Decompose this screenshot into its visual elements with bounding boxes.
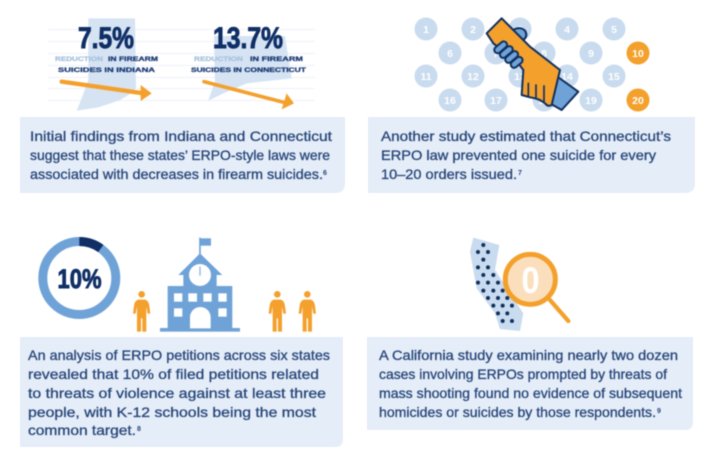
icon grid: numbered circles: 7	[493, 48, 499, 60]
icon: school building	[160, 238, 240, 332]
panel: analysis of ERPO petitions	[20, 238, 343, 447]
text box: Connecticut study: ERPO law prevented one suicide for every	[381, 147, 656, 163]
label: Indiana reduction: SUICIDES IN INDIANA	[58, 67, 155, 74]
chart: 10% donut: 10%	[58, 264, 102, 294]
text box: initial findings: associated with decreases in firearm suicides.	[30, 166, 323, 182]
icon grid: numbered circles: 1	[423, 24, 429, 36]
icon grid: numbered circles: 13	[514, 71, 526, 83]
text box: California findings	[367, 337, 693, 430]
icon grid: numbered circles: 8	[541, 48, 547, 60]
icon grid: numbered circles: 20	[632, 95, 644, 107]
icon grid: numbered circles: 15	[608, 71, 620, 83]
text box: California findings: homicides or suicides by those respondents.	[379, 404, 656, 420]
text box: petitions analysis: people, with K-12 schools being the most	[28, 404, 316, 420]
label: Connecticut reduction: REDUCTION	[194, 56, 243, 63]
text box: petitions analysis: 8	[137, 426, 141, 433]
panel: California study	[367, 238, 693, 430]
text box: petitions analysis: revealed that 10% of filed petitions related	[28, 366, 319, 382]
text box: California findings: A California study examining nearly two dozen	[379, 347, 678, 363]
icon grid: numbered circles: 12	[467, 71, 479, 83]
panel: Indiana and Connecticut reductions	[20, 18, 345, 193]
text box: petitions analysis: to threats of violence against at least three	[28, 385, 326, 401]
stat: 13.7%: 13.7%	[213, 22, 283, 55]
icon grid: numbered circles: 6	[447, 48, 453, 60]
icon grid: numbered circles: 9	[588, 48, 594, 60]
panel: suicides prevented per orders	[368, 18, 695, 193]
text box: initial findings: suggest that these states’ ERPO-style laws were	[30, 147, 330, 163]
text box: Connecticut study: Another study estimated that Connecticut’s	[381, 128, 671, 144]
label: Connecticut reduction: IN FIREARM	[250, 56, 303, 63]
label: Connecticut reduction	[191, 56, 306, 74]
map: California with dots	[470, 238, 523, 331]
text box: petitions analysis: common target.	[28, 422, 136, 438]
icon grid: numbered circles: 2	[470, 24, 476, 36]
text box: initial findings: Initial findings from Indiana and Connecticut	[30, 128, 332, 144]
text box: initial findings: 6	[323, 170, 327, 177]
icon grid: numbered circles: 4	[564, 24, 570, 36]
map: Connecticut outline	[208, 36, 292, 101]
text box: California findings: 9	[657, 408, 661, 415]
text box: initial findings	[20, 117, 345, 193]
icon grid: numbered circles: 3	[517, 24, 523, 36]
icon grid: numbered circles: 10	[632, 48, 644, 60]
icon grid: numbered circles: 14	[561, 71, 573, 83]
icon grid: numbered circles: 17	[490, 95, 502, 107]
icon: magnifying glass with zero	[505, 254, 568, 321]
text box: Connecticut study: 7	[518, 170, 522, 177]
map: Indiana outline	[77, 18, 136, 111]
icon: hand gripping firearm	[487, 18, 578, 110]
text box: Connecticut study: 10–20 orders issued.	[381, 166, 517, 182]
text box: California findings: mass shooting found no evidence of subsequent	[379, 385, 682, 401]
icon: three people	[133, 291, 316, 332]
text box: petitions analysis: An analysis of ERPO petitions across six states	[28, 347, 330, 363]
text box: Connecticut study	[368, 117, 695, 193]
label: Indiana reduction	[55, 56, 158, 74]
icon grid: numbered circles: 16	[444, 95, 456, 107]
chart: firearm suicide reductions	[48, 18, 315, 111]
icon grid: numbered circles: 11	[420, 71, 432, 83]
chart: 10% donut	[43, 242, 116, 314]
arrow: Indiana decrease	[62, 82, 152, 101]
text box: California findings: cases involving ERPOs prompted by threats of	[379, 366, 667, 382]
label: Indiana reduction: REDUCTION	[55, 56, 103, 63]
label: Connecticut reduction: SUICIDES IN CONNECTICUT	[191, 67, 306, 74]
text box: petitions analysis	[20, 337, 343, 447]
stat: 7.5%: 7.5%	[78, 22, 134, 55]
icon: magnifying glass with zero: 0	[522, 260, 540, 301]
icon grid: numbered circles: 19	[585, 95, 597, 107]
icon grid: numbered circles: 18	[538, 95, 550, 107]
icon grid: numbered circles: 5	[611, 24, 617, 36]
label: Indiana reduction: IN FIREARM	[108, 56, 158, 63]
arrow: Connecticut decrease	[204, 82, 294, 109]
icon grid: numbered circles	[414, 18, 650, 112]
